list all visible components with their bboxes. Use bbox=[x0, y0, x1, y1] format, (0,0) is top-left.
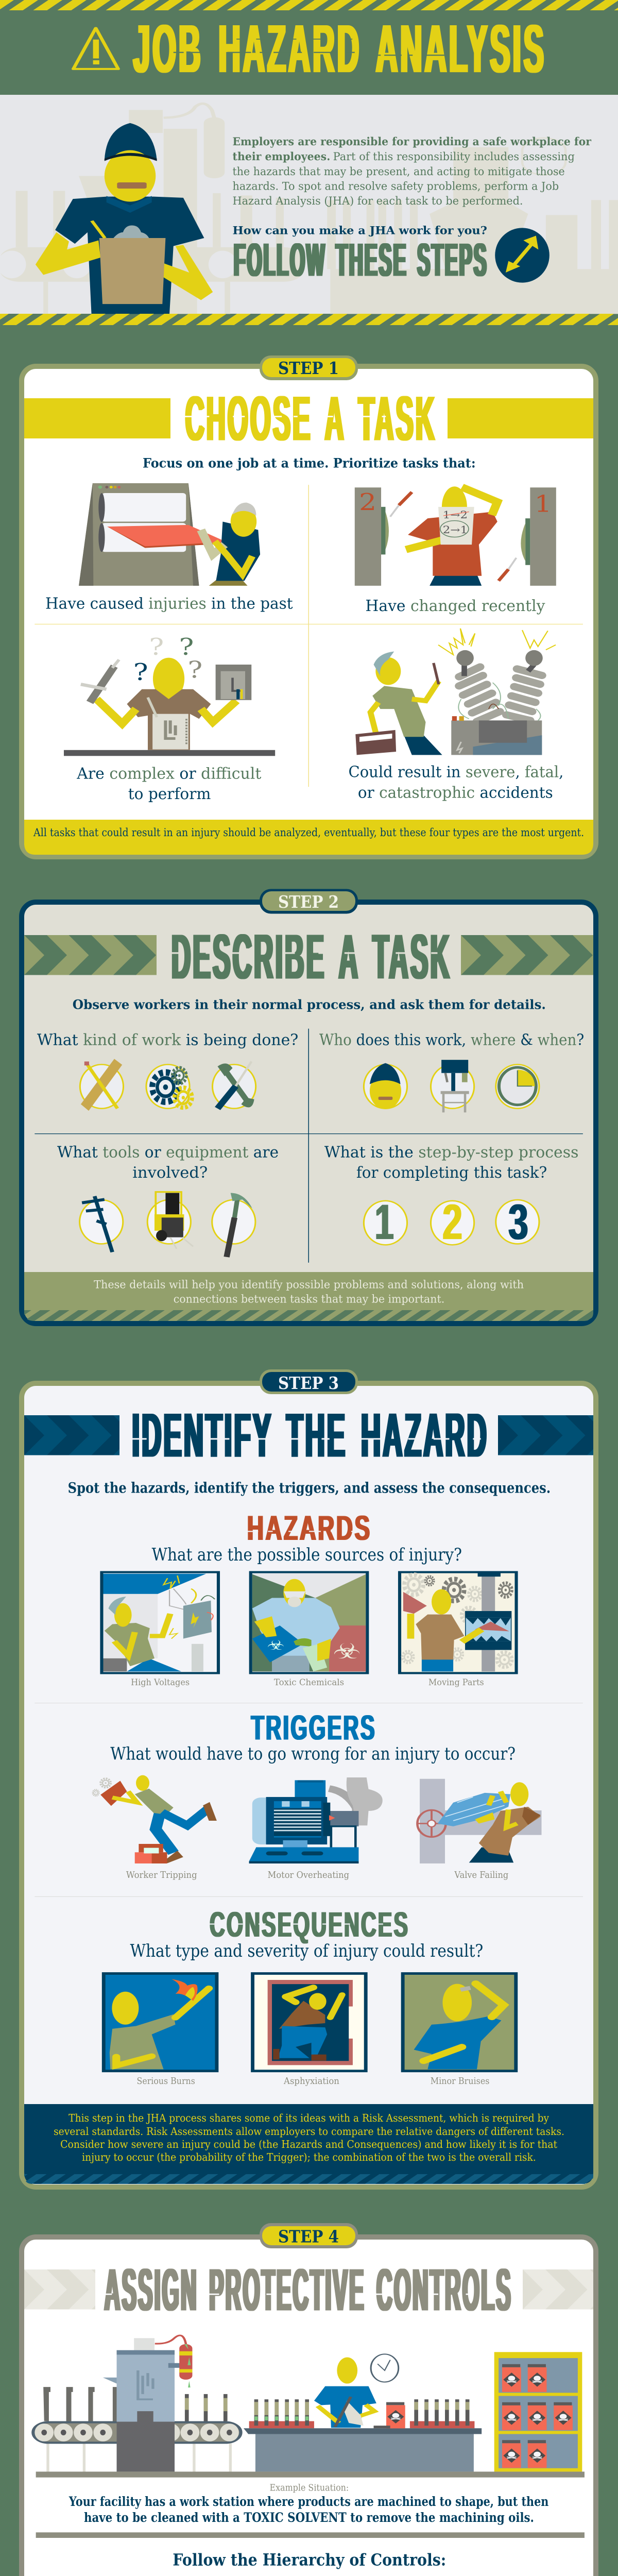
illustration: confused worker with complex parts: ? bbox=[187, 656, 202, 683]
illustration: confused worker with complex parts: ? bbox=[149, 633, 164, 660]
illustration: worker reading changed procedure: 2 bbox=[359, 489, 376, 516]
question: step by step: for completing this task? bbox=[356, 1163, 547, 1181]
question: tools or equipment: involved? bbox=[132, 1163, 208, 1181]
hazard section content: HAZARDS bbox=[247, 1509, 372, 1548]
illustration: confused worker with complex parts: ? bbox=[133, 658, 148, 686]
icon row: numbers bbox=[364, 1194, 539, 1250]
bottom stripes bbox=[24, 2174, 593, 2184]
factory silhouette backdrop bbox=[0, 104, 618, 314]
caption: Motor Overheating bbox=[268, 1870, 349, 1880]
header: job hazard analysis bbox=[0, 0, 618, 87]
illustration: work station scene bbox=[33, 2335, 585, 2478]
illustration: worker reading changed procedure: 2→1 bbox=[443, 524, 468, 535]
icon: warning triangle bbox=[73, 28, 118, 69]
frame: toxic chemicals bbox=[251, 1572, 367, 1673]
example description bbox=[68, 2493, 548, 2525]
panel frame bbox=[22, 902, 596, 1324]
question: tools or equipment bbox=[57, 1143, 279, 1181]
hazard stripe top bbox=[0, 0, 618, 10]
lead sentence: Focus on one job at a time. Prioritize tasks that: bbox=[143, 455, 476, 471]
step 1 badge bbox=[260, 355, 358, 380]
bottom note bbox=[54, 2112, 564, 2163]
chevron band right bbox=[461, 935, 593, 975]
chevron band right bbox=[523, 2269, 593, 2309]
caption: Asphyxiation bbox=[283, 2076, 339, 2087]
illustration: worker tripping bbox=[93, 1775, 217, 1863]
hazard stripe below intro bbox=[0, 314, 618, 325]
illustration: worker reading changed procedure: 1 bbox=[535, 490, 552, 517]
step 1 content bbox=[33, 383, 584, 839]
chevron band left bbox=[24, 2269, 95, 2309]
intro paragraph bbox=[233, 135, 592, 208]
caption: Have changed recently bbox=[365, 597, 545, 615]
frame: moving parts bbox=[400, 1572, 517, 1673]
panel: step 2 describe a task bbox=[22, 889, 596, 1324]
panel: step 3 identify the hazard bbox=[22, 1369, 596, 2187]
frame: minor bruises bbox=[403, 1974, 516, 2071]
panel frame bbox=[22, 1383, 596, 2187]
heading band left bbox=[24, 398, 170, 438]
bottom note band bbox=[24, 1272, 593, 1321]
example label: Example Situation: bbox=[269, 2483, 349, 2493]
caption: Worker Tripping bbox=[126, 1870, 197, 1880]
frame: serious burns bbox=[104, 1974, 217, 2071]
icon: arrow in circle bbox=[495, 228, 550, 283]
panel: step 4 assign protective controls bbox=[22, 2223, 596, 2576]
worker with clipboard bbox=[36, 123, 213, 314]
caption: Serious Burns bbox=[137, 2076, 195, 2087]
step 4 badge: STEP 4 bbox=[278, 2227, 339, 2246]
question: who where when: Who does this work, where & when? bbox=[319, 1030, 584, 1049]
step 1 badge: STEP 1 bbox=[278, 358, 339, 378]
caption: Could result in severe, fatal, bbox=[349, 763, 563, 781]
intro paragraph: their employees. bbox=[233, 150, 330, 163]
caption bbox=[349, 763, 563, 802]
illustration: valve failing bbox=[417, 1779, 542, 1863]
frame: toxic chemicals: ☣ bbox=[267, 1638, 285, 1653]
step 2 content bbox=[35, 921, 584, 1306]
bottom note bbox=[94, 1278, 524, 1306]
icon row: who where when bbox=[364, 1060, 539, 1112]
bottom stripes bbox=[24, 1310, 593, 1321]
caption: Have caused injuries in the past bbox=[45, 594, 293, 613]
panel frame bbox=[22, 2237, 596, 2576]
illustration: confused worker with complex parts: ? bbox=[179, 633, 194, 660]
frame: asphyxiation bbox=[253, 1974, 366, 2071]
caption: High Voltages bbox=[131, 1677, 190, 1688]
icon row: tools and equipment bbox=[80, 1192, 255, 1257]
caption bbox=[76, 764, 262, 803]
step 3 badge bbox=[260, 1369, 358, 1394]
step 3 badge: STEP 3 bbox=[278, 1373, 339, 1393]
icon row: numbers: 1 bbox=[375, 1194, 394, 1250]
icon row: numbers: 3 bbox=[508, 1194, 528, 1250]
panel: step 1 choose a task bbox=[22, 355, 596, 857]
bottom note: These details will help you identify possible problems and solutions, along with bbox=[94, 1278, 524, 1291]
question: step by step bbox=[324, 1143, 578, 1181]
hazard section content: TRIGGERS bbox=[251, 1708, 376, 1747]
question: what kind of work: What kind of work is being done? bbox=[37, 1030, 298, 1049]
chevron band left bbox=[24, 1415, 119, 1455]
illustration: injured worker at roller machine bbox=[79, 483, 260, 586]
illustration: motor overheating bbox=[249, 1777, 383, 1863]
caption: to perform bbox=[128, 785, 211, 803]
caption: Valve Failing bbox=[454, 1870, 508, 1880]
illustration: worker at high voltage insulators bbox=[355, 629, 556, 755]
panel: introduction bbox=[0, 95, 618, 325]
chevron band right bbox=[498, 1415, 593, 1455]
bottom note: connections between tasks that may be important. bbox=[174, 1293, 444, 1306]
icon row: kind of work bbox=[80, 1059, 256, 1111]
question: step by step: What is the step-by-step process bbox=[324, 1143, 578, 1161]
heading band right bbox=[448, 398, 593, 438]
illustration: worker reading changed procedure: 1→2 bbox=[443, 509, 468, 521]
question: tools or equipment: What tools or equipment are bbox=[57, 1143, 279, 1161]
step 4 badge bbox=[260, 2223, 358, 2248]
example scene and hierarchy start bbox=[33, 2257, 585, 2576]
caption: Toxic Chemicals bbox=[274, 1677, 344, 1688]
intro background bbox=[0, 95, 618, 314]
bottom note band bbox=[24, 820, 593, 855]
caption: Are complex or difficult bbox=[76, 764, 262, 783]
frame: toxic chemicals: ☣ bbox=[333, 1639, 361, 1664]
caption: or catastrophic accidents bbox=[358, 783, 553, 802]
step 2 badge: STEP 2 bbox=[278, 892, 339, 912]
illustration: worker reading changed procedure bbox=[355, 486, 556, 586]
caption: Moving Parts bbox=[428, 1677, 484, 1688]
illustration: confused worker with complex parts bbox=[64, 633, 275, 756]
hierarchy heading: Follow the Hierarchy of Controls: bbox=[173, 2550, 446, 2569]
bottom note band bbox=[24, 2104, 593, 2184]
panel frame bbox=[22, 366, 596, 857]
hazard section content bbox=[35, 1400, 583, 1764]
chevron band left bbox=[24, 935, 157, 975]
icon row: numbers: 2 bbox=[442, 1194, 462, 1250]
frame: high voltages bbox=[101, 1572, 218, 1673]
caption: Minor Bruises bbox=[431, 2076, 490, 2087]
step 2 badge bbox=[260, 889, 358, 914]
triggers and consequences content bbox=[35, 1775, 583, 2087]
title banner bbox=[73, 11, 546, 87]
intro content bbox=[0, 104, 618, 314]
